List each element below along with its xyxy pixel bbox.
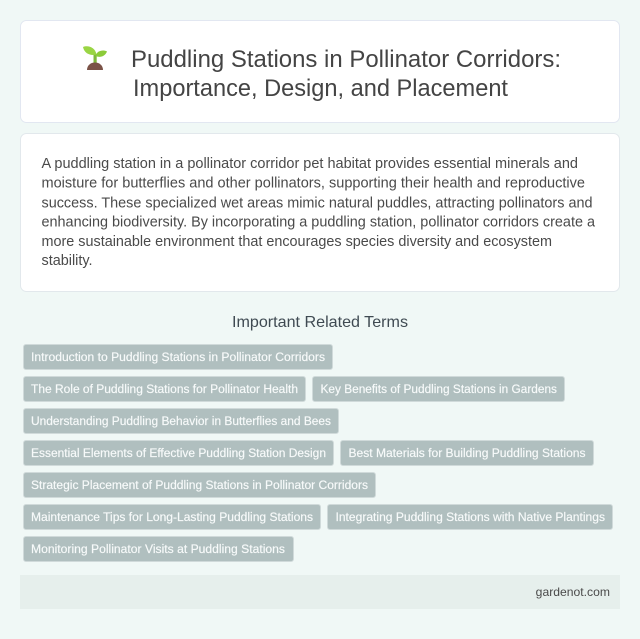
heading: related terms: Important Related Terms [232,314,408,331]
tag: maintenance [24,504,320,530]
text block: description: more sustainable environment that encourages species diversity and ecosystem [42,234,552,250]
tag: design: Essential Elements of Effective Puddling Station Design [31,446,326,460]
tag: introduction: Introduction to Puddling Stations in Pollinator Corridors [31,350,325,364]
tag: monitoring: Monitoring Pollinator Visits at Puddling Stations [31,542,285,556]
tag: role: The Role of Puddling Stations for Pollinator Health [31,382,298,396]
text block: description: moisture for butterflies and other pollinators, supporting their health and reproductive [42,176,585,192]
tag: native plantings: Integrating Puddling Stations with Native Plantings [336,510,605,524]
tag: introduction [24,344,332,370]
text block: description: A puddling station in a pollinator corridor pet habitat provides essential minerals and [42,156,578,172]
tag: behavior: Understanding Puddling Behavior in Butterflies and Bees [31,414,331,428]
tag: placement [24,472,376,498]
tag: maintenance: Maintenance Tips for Long-Lasting Puddling Stations [31,510,313,524]
tag: role [24,376,306,402]
icon: seedling [83,46,107,70]
tag: materials: Best Materials for Building Puddling Stations [348,446,586,460]
tag: placement: Strategic Placement of Puddling Stations in Pollinator Corridors [31,478,368,492]
footer: gardenot.com [536,585,610,599]
tag: monitoring [24,536,294,562]
text block: description: stability. [42,253,92,269]
tag: behavior [24,408,338,434]
footer [20,575,620,609]
tag list [24,344,612,562]
text block: description [42,156,595,269]
text block: description: success. These specialized wet areas mimic natural puddles, attracting pollinators and [42,196,592,212]
title: Importance, Design, and Placement [133,75,508,102]
tag: materials [340,440,594,466]
tag: design [24,440,334,466]
text block: description: enhancing biodiversity. By incorporating a puddling station, pollinator corridors create a [42,214,595,230]
title: Puddling Stations in Pollinator Corridors: [131,46,561,73]
panel: description [20,134,620,292]
tag: benefits: Key Benefits of Puddling Stations in Gardens [320,382,557,396]
tag: native plantings [328,504,612,530]
title [131,46,561,102]
panel: header [20,20,620,122]
tag: benefits [312,376,564,402]
